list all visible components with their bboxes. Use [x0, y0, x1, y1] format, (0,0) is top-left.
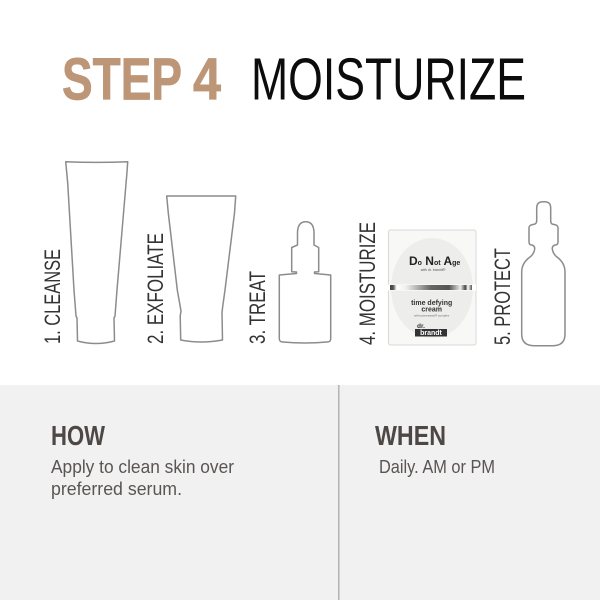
how body text: Apply to clean skin over — [51, 456, 234, 477]
label: 4. moisturize: 4. MOISTURIZE — [355, 222, 380, 345]
how body text: preferred serum. — [51, 478, 182, 499]
icon: treatment dropper bottle — [279, 222, 331, 343]
icon: time defying cream jar — [388, 230, 476, 345]
icon: time defying cream jar: Do Not Age — [409, 254, 460, 268]
step 3: treat — [245, 222, 331, 344]
label: 1. cleanse: 1. CLEANSE — [40, 249, 65, 344]
step 1: cleanse — [40, 162, 128, 344]
icon: exfoliator tube — [167, 196, 236, 342]
icon: time defying cream jar: cream — [421, 306, 442, 314]
icon: time defying cream jar: with pomezanol® complex — [414, 314, 450, 318]
title — [62, 46, 526, 112]
icon: time defying cream jar: brandt — [420, 330, 443, 337]
label: 5. protect: 5. PROTECT — [490, 248, 515, 345]
step 2: exfoliate — [143, 196, 236, 344]
when body text: Daily. AM or PM — [379, 456, 495, 477]
panel: how and when — [0, 385, 600, 600]
divider — [338, 385, 340, 600]
when heading: WHEN — [375, 420, 446, 451]
title: 4 — [193, 46, 221, 112]
how body text — [51, 456, 234, 499]
icon: protect dropper bottle — [522, 202, 565, 346]
label: 3. treat: 3. TREAT — [245, 271, 270, 344]
step 4: moisturize — [355, 222, 476, 345]
label: 2. exfoliate: 2. EXFOLIATE — [143, 233, 168, 344]
icon: time defying cream jar: time defying — [411, 300, 452, 307]
title: STEP — [62, 46, 182, 112]
icon: time defying cream jar: dr. — [417, 323, 425, 330]
icon: time defying cream jar: with dr. brandt® — [421, 268, 446, 272]
icon: cleanser tube — [66, 162, 128, 344]
how heading: HOW — [51, 420, 105, 451]
step 5: protect — [490, 202, 565, 346]
